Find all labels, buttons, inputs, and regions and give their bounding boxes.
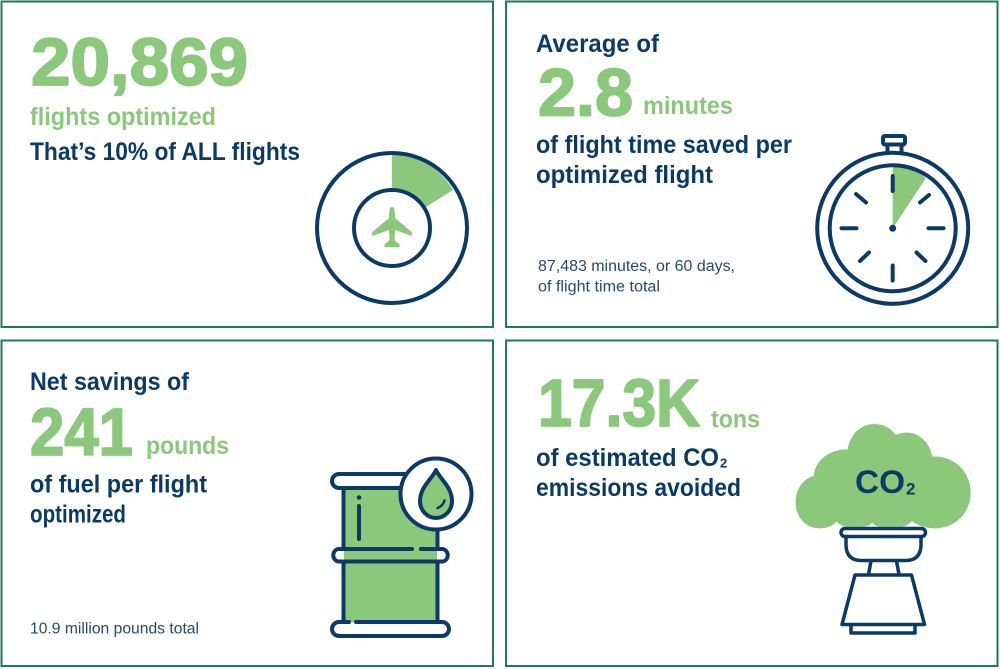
note: total pounds: 10.9 million pounds total xyxy=(30,620,199,638)
label: minutes: minutes xyxy=(643,92,733,120)
stat: 241: 241 xyxy=(30,395,133,470)
text: fuel per flight optimized: optimized xyxy=(30,500,126,528)
text: fuel per flight optimized xyxy=(30,470,208,528)
text: fuel per flight optimized: of fuel per flight xyxy=(30,470,208,498)
stat: 17.3K: 17.3K xyxy=(538,366,700,441)
text: flight time saved per optimized flight: of flight time saved per xyxy=(536,131,792,159)
note: total flight time xyxy=(538,258,735,296)
text: estimated CO2 emissions avoided: 2 xyxy=(720,456,727,470)
panel: fuel savings xyxy=(2,340,493,666)
panel: CO2 avoided xyxy=(506,340,998,666)
text: flight time saved per optimized flight xyxy=(536,131,792,189)
icon: oil barrel with drop xyxy=(332,458,472,636)
icon: CO2 cloud over chimney: CO xyxy=(855,464,905,500)
heading: average of: Average of xyxy=(536,30,660,58)
label: pounds: pounds xyxy=(146,432,229,460)
icon: donut chart with plane xyxy=(317,153,467,303)
text: estimated CO2 emissions avoided: emissions avoided xyxy=(536,474,741,502)
stat: 2.8: 2.8 xyxy=(538,56,633,130)
heading: net savings of: Net savings of xyxy=(30,368,190,396)
icon: stopwatch xyxy=(817,136,968,304)
panel: flight time saved xyxy=(506,2,998,327)
text: share of all flights: That’s 10% of ALL flights xyxy=(30,138,300,166)
note: total flight time: 87,483 minutes, or 60 days, xyxy=(538,258,735,275)
note: total flight time: of flight time total xyxy=(538,278,660,296)
label: flights optimized: flights optimized xyxy=(30,103,216,131)
text: estimated CO2 emissions avoided xyxy=(536,444,741,502)
text: estimated CO2 emissions avoided: of estimated CO xyxy=(536,444,719,472)
text: flight time saved per optimized flight: optimized flight xyxy=(536,161,714,189)
icon: CO2 cloud over chimney xyxy=(796,424,971,633)
label: tons: tons xyxy=(711,406,760,434)
icon: CO2 cloud over chimney: 2 xyxy=(906,480,915,498)
stat: 20,869: 20,869 xyxy=(31,25,248,100)
panel: flights optimized xyxy=(2,2,493,327)
